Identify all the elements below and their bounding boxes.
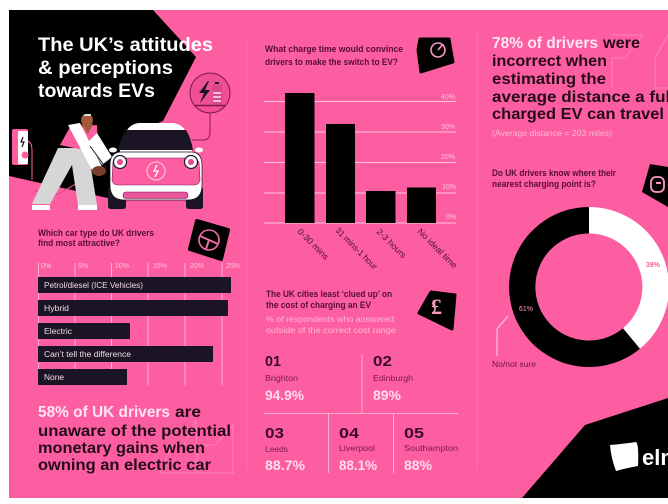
city: Southampton: 88% (404, 457, 433, 473)
icon: quote outline right (612, 35, 668, 88)
bar chart: charge time: 10% (442, 184, 456, 191)
car (108, 123, 203, 209)
city: Edinburgh: Edinburgh (373, 373, 413, 383)
bar chart: car types: 20% (190, 263, 204, 270)
bar chart: car types: 5% (78, 263, 88, 270)
bar chart: charge time: 31 mins-1 hour (334, 225, 380, 271)
bar chart: car types: 15% (153, 263, 167, 270)
bar chart: charge time: 20% (441, 154, 455, 161)
bar chart: car types: 25% (226, 263, 240, 270)
panel: cities (264, 289, 458, 473)
city: Southampton: 05 (404, 425, 424, 442)
city: Leeds: 03 (265, 425, 284, 442)
callout: 78% of drivers: incorrect when (492, 53, 607, 70)
heading: car type question: Which car type do UK drivers (38, 228, 154, 238)
callout: 58% of UK drivers (38, 404, 231, 474)
panel: car type attractiveness (38, 221, 240, 385)
heading: charging point question (492, 168, 616, 189)
icon: pound (419, 292, 455, 329)
icon: pound: £ (431, 294, 442, 319)
title: The UK’s attitudes (38, 35, 213, 56)
heading: charge time question: drivers to make the switch to EV? (265, 57, 398, 67)
icon: battery and bolt bubble (190, 73, 230, 140)
city: Liverpool: 88.1% (339, 457, 378, 473)
charging cable (35, 174, 92, 196)
city: Southampton (404, 425, 458, 473)
donut chart (509, 207, 668, 367)
city: Brighton: 01 (265, 353, 281, 370)
heading: charging point question: Do UK drivers know where their (492, 168, 616, 178)
bar chart: car types: Hybrid (44, 304, 69, 313)
city: Southampton: Southampton (404, 443, 458, 453)
icon: steering wheel (190, 221, 228, 259)
callout: 58% of UK drivers: 58% of UK drivers (38, 404, 170, 421)
logo: elm (610, 442, 668, 471)
title: & perceptions (38, 58, 173, 79)
icon: clock (418, 39, 453, 72)
city: Leeds: 88.7% (265, 457, 306, 473)
heading: cities (266, 289, 392, 310)
city: Leeds: Leeds (265, 444, 288, 454)
text: average distance note: (Average distance = 203 miles) (492, 128, 612, 138)
callout: 58% of UK drivers: monetary gains when (38, 440, 205, 457)
bar chart: charge time: 40% (441, 94, 455, 101)
callout: 78% of drivers (492, 35, 668, 123)
label: no/not sure: No/not sure (492, 359, 536, 369)
bar chart: car types (38, 263, 240, 385)
heading: charging point question: nearest charging point is? (492, 179, 596, 189)
black header shape (9, 10, 196, 199)
icon: quote outline left (160, 420, 233, 473)
bar chart: charge time: No ideal time (416, 226, 460, 270)
panel: charge time (264, 39, 460, 271)
person (32, 114, 112, 210)
callout: 58% of UK drivers: are (175, 404, 201, 421)
heading: cities: The UK cities least ‘clued up’ on (266, 289, 392, 299)
heading: car type question (38, 228, 154, 248)
text: cities subtitle (266, 314, 396, 335)
city: Leeds (265, 425, 306, 473)
callout: 58% of UK drivers: owning an electric car (38, 457, 211, 474)
bar chart: charge time: 0% (446, 214, 456, 221)
city: Brighton: 94.9% (265, 387, 305, 403)
bar chart: charge time: 0-30 mins (296, 226, 331, 262)
bar chart: charge time: 30% (441, 124, 455, 131)
bar chart: charge time (264, 93, 460, 271)
icon: charging station (12, 129, 32, 180)
city: Liverpool: 04 (339, 425, 360, 442)
donut chart: 61% (519, 306, 533, 313)
bar chart: car types: None (44, 373, 65, 382)
city: Liverpool: Liverpool (339, 443, 375, 453)
city: Edinburgh: 89% (373, 387, 402, 403)
city: Liverpool (339, 425, 378, 473)
callout: 78% of drivers: were (602, 35, 640, 52)
icon: plug (642, 164, 668, 207)
heading: car type question: find most attractive? (38, 238, 120, 248)
heading: cities: the cost of charging an EV (266, 300, 371, 310)
city: Edinburgh (373, 353, 413, 403)
illustration: person charging car (12, 73, 230, 210)
city: Brighton (265, 353, 305, 403)
callout: 78% of drivers: 78% of drivers (492, 35, 598, 52)
leader line (497, 316, 508, 356)
bar chart: car types: Can’t tell the difference (44, 350, 132, 359)
donut chart: 39% (646, 262, 661, 269)
heading: charge time question: What charge time would convince (265, 44, 403, 54)
bar chart: car types: Electric (44, 327, 72, 336)
callout: 78% of drivers: average distance a full (492, 89, 668, 106)
black footer shape (522, 398, 668, 498)
title: towards EVs (38, 81, 155, 102)
heading: charge time question (265, 44, 403, 67)
panel: charging point knowledge (492, 164, 668, 369)
text: cities subtitle: outside of the correct cost range (266, 325, 396, 335)
bar chart: car types: 10% (115, 263, 129, 270)
callout: 78% of drivers: charged EV can travel (492, 106, 664, 123)
callout: 78% of drivers: estimating the (492, 71, 606, 88)
title (38, 35, 213, 102)
callout: 58% of UK drivers: unaware of the potential (38, 423, 231, 440)
bar chart: charge time: 2-3 hours (375, 226, 409, 260)
text: cities subtitle: % of respondents who answered (266, 314, 394, 324)
city: Edinburgh: 02 (373, 353, 392, 370)
city: Brighton: Brighton (265, 373, 298, 383)
bar chart: car types: Petrol/diesel (ICE Vehicles) (44, 281, 143, 290)
bar chart: car types: 0% (41, 263, 51, 270)
